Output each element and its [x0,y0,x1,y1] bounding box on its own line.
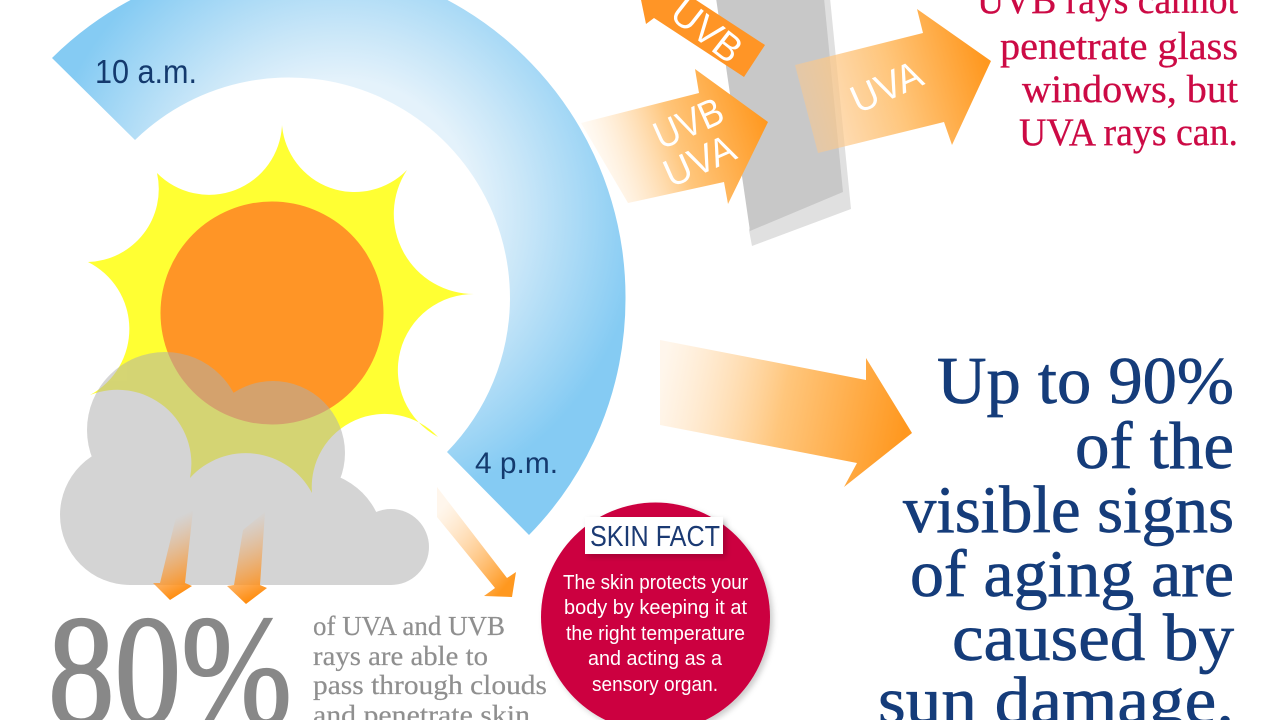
text: clouds description: rays are able to [313,641,488,671]
arrow: UVB and UVA hitting glass: UVA [657,127,742,196]
text: clouds description: of UVA and UVB [313,611,505,641]
text: glass windows note: UVA rays can. [1019,111,1238,154]
skin fact body text: the right temperature [566,623,745,645]
arrow: UVA passing through glass [795,9,991,153]
text: up to 90 percent statistic: Up to 90% [937,344,1234,418]
heading box: skin fact: SKIN FACT [590,521,720,553]
text: up to 90 percent statistic: of the [1075,409,1234,483]
text: up to 90 percent statistic: visible signs [903,473,1234,547]
text: up to 90 percent statistic: of aging are [910,537,1234,611]
arrow: rays to skin fact [437,487,516,597]
window glass [716,0,851,246]
text: up to 90 percent statistic: caused by [952,601,1235,675]
text: clouds description [313,611,547,720]
icon: sun [88,125,475,493]
arrow: UVB reflected by glass [640,0,765,77]
text: glass windows note: penetrate glass [1000,25,1238,68]
arrow: UVB and UVA hitting glass: UVB [647,90,730,158]
arrow: UVB and UVA hitting glass [581,69,768,204]
arrow: UVA passing through glass: UVA [844,53,929,122]
icon: cloud [60,352,429,585]
text: glass windows note [977,0,1238,154]
text: glass windows note: windows, but [1022,68,1238,111]
arrow: rays through cloud, left [153,510,193,600]
sky arc from 10 a.m. to 4 p.m. [52,0,626,535]
skin fact body text: The skin protects your [563,572,748,594]
skin fact body text: and acting as a [588,648,723,670]
panel: skin fact [541,502,770,720]
text: clouds description: pass through clouds [313,670,547,700]
skin fact body text: sensory organ. [592,674,718,696]
skin fact body text: body by keeping it at [564,597,747,619]
skin fact body text [563,572,748,696]
label: 10 a.m.: 10 a.m. [95,53,197,90]
arrow: rays through cloud, right [227,512,267,604]
text: up to 90 percent statistic [878,344,1235,720]
red circle [541,502,770,720]
arrow: sun damage [660,340,912,487]
label: 4 p.m.: 4 p.m. [475,447,558,480]
